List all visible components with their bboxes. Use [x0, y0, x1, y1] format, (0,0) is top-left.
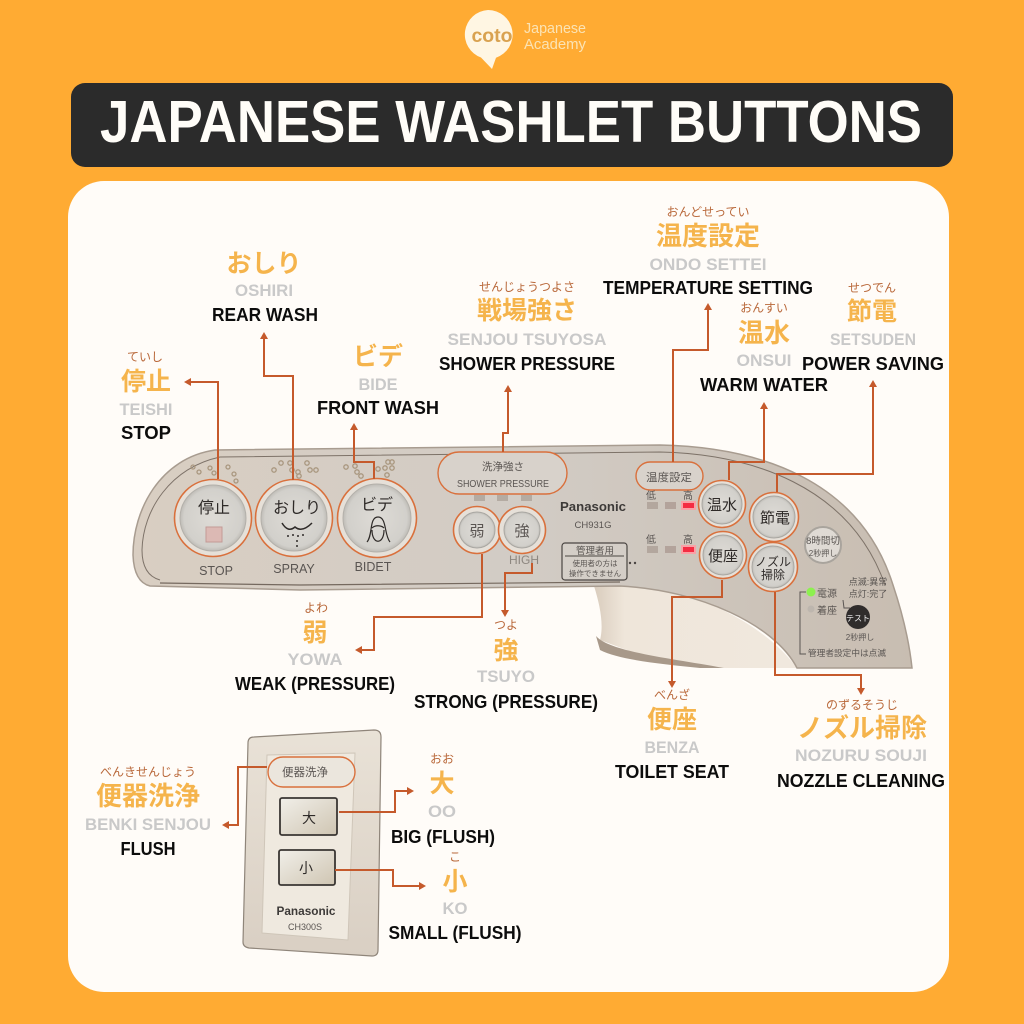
label: big flush: OO — [428, 802, 456, 821]
button: bidet: ビデ — [361, 495, 393, 514]
button: spray — [255, 479, 333, 576]
label: temperature setting: ONDO SETTEI — [650, 255, 766, 274]
label: toilet seat: 便座 — [647, 706, 697, 734]
arrow: temperature setting — [673, 303, 712, 462]
label: nozzle cleaning: のずるそうじ — [826, 698, 898, 712]
toilet seat body behind control panel — [594, 586, 797, 668]
label: shower pressure: せんじょうつよさ — [479, 280, 575, 294]
label: shower pressure: SHOWER PRESSURE — [439, 354, 615, 374]
temperature indicators: water: 高 — [683, 489, 693, 502]
button: weak: 弱 — [469, 523, 485, 540]
label: temperature setting: 温度設定 — [656, 221, 760, 251]
temperature indicators: seat: 低 — [646, 534, 656, 546]
status lights and test button: 点滅:異常 — [849, 576, 887, 587]
panel: white card — [68, 181, 949, 992]
label: nozzle cleaning: ノズル掃除 — [797, 713, 927, 743]
label: toilet seat: TOILET SEAT — [615, 762, 729, 782]
temperature indicators: water: 低 — [646, 490, 656, 502]
arrow: small flush — [335, 870, 426, 890]
arrow: nozzle cleaning — [775, 592, 865, 695]
button: bidet — [337, 478, 417, 574]
brand: Panasonic CH300S: Panasonic — [276, 906, 336, 918]
label: toilet seat — [615, 687, 729, 782]
brand: Panasonic CH931G: CH931G — [575, 520, 611, 531]
button: 8 hour off: 2秒押し — [809, 548, 837, 558]
label: stop: TEISHI — [120, 400, 172, 419]
label: rear wash: OSHIRI — [235, 281, 293, 300]
label pill: temperature setting: 温度設定 — [646, 471, 692, 484]
label: front wash — [317, 342, 439, 418]
label: flush — [85, 765, 211, 859]
pressure indicator lights — [474, 495, 532, 501]
admin notice box — [562, 543, 636, 580]
label: rear wash: REAR WASH — [212, 305, 318, 325]
braille dots — [191, 460, 394, 483]
arrow: weak — [355, 554, 482, 654]
button: weak — [453, 506, 501, 554]
label: big flush: おお — [430, 752, 454, 766]
label: warm water: WARM WATER — [700, 375, 828, 395]
arrow: big flush — [339, 787, 414, 812]
arrow: strong — [501, 563, 532, 617]
button: toilet seat: 便座 — [708, 548, 738, 565]
label: power saving: SETSUDEN — [830, 330, 916, 349]
button: big flush: 大 — [302, 810, 316, 826]
button: stop: 停止 — [198, 499, 230, 517]
button: strong: 強 — [514, 523, 530, 540]
label: power saving — [802, 281, 944, 374]
label: rear wash — [212, 250, 318, 325]
label pill: flush — [268, 757, 355, 787]
label: flush: BENKI SENJOU — [85, 815, 211, 834]
temperature indicators: seat — [646, 533, 695, 553]
label: weak: YOWA — [288, 650, 342, 669]
label pill: shower pressure — [438, 452, 567, 494]
label: front wash: ビデ — [353, 342, 403, 371]
arrow: power saving — [777, 380, 877, 492]
label: strong: つよ — [494, 618, 518, 632]
label: shower pressure — [439, 280, 615, 374]
label: flush: FLUSH — [120, 839, 176, 859]
label: nozzle cleaning — [777, 698, 945, 791]
button: bidet: BIDET — [355, 560, 392, 574]
temperature indicators: seat: 高 — [683, 533, 693, 546]
label: toilet seat: べんざ — [654, 687, 690, 702]
label: small flush: KO — [442, 899, 468, 918]
button: nozzle cleaning: ノズル — [755, 554, 791, 569]
arrow: shower pressure — [503, 385, 512, 452]
button: big flush — [280, 798, 337, 835]
arrow: warm water — [729, 402, 768, 480]
label: shower pressure: SENJOU TSUYOSA — [448, 330, 606, 349]
button: spray: おしり — [273, 499, 321, 517]
label: weak: よわ — [304, 601, 328, 615]
button: stop: STOP — [199, 564, 233, 578]
label: weak — [235, 601, 395, 694]
button: nozzle cleaning — [748, 542, 798, 592]
label: big flush — [391, 752, 495, 847]
logo: Japanese — [524, 20, 586, 37]
label: power saving: せつでん — [848, 281, 896, 295]
label: warm water: おんすい — [740, 301, 788, 315]
button: small flush — [279, 850, 335, 885]
label: stop — [120, 350, 172, 443]
label: flush: 便器洗浄 — [96, 781, 200, 811]
status lights and test button — [800, 576, 887, 658]
status lights and test button: テスト — [846, 614, 870, 623]
label pill: shower pressure: 洗浄強さ — [482, 460, 524, 473]
status lights and test button: 管理者設定中は点滅 — [808, 648, 886, 658]
arrow: stop — [184, 378, 218, 479]
panel: washlet control panel — [133, 445, 912, 668]
arrow: rear wash — [260, 332, 293, 480]
label: stop: 停止 — [121, 368, 171, 396]
button: warm water: 温水 — [707, 497, 737, 514]
label pill: flush: 便器洗浄 — [282, 765, 328, 779]
label: power saving: POWER SAVING — [802, 354, 944, 374]
button: toilet seat — [699, 531, 747, 579]
brand: Panasonic CH931G: Panasonic — [560, 499, 626, 514]
arrow: front wash — [350, 423, 374, 479]
label: small flush: 小 — [442, 868, 468, 896]
button: small flush: 小 — [299, 860, 313, 876]
brand: Panasonic CH300S — [276, 906, 336, 932]
arrow: flush — [222, 767, 267, 829]
label: power saving: 節電 — [847, 298, 897, 326]
label: warm water: 温水 — [738, 318, 790, 348]
button: spray: SPRAY — [273, 562, 315, 576]
label: strong: 強 — [493, 637, 519, 665]
button: stop — [174, 479, 252, 578]
label: temperature setting — [603, 205, 813, 298]
label: big flush: BIG (FLUSH) — [391, 827, 495, 847]
brand: Panasonic CH300S: CH300S — [288, 922, 322, 932]
label: strong — [414, 618, 598, 712]
logo: coto — [472, 26, 512, 47]
label: big flush: 大 — [429, 770, 455, 798]
label: small flush — [388, 850, 522, 943]
button: warm water — [698, 480, 746, 528]
status lights and test button: 着座 — [817, 604, 837, 617]
label: nozzle cleaning: NOZZLE CLEANING — [777, 771, 945, 791]
label pill: shower pressure: SHOWER PRESSURE — [457, 478, 549, 490]
status lights and test button: 2秒押し — [846, 632, 874, 642]
label: strong: STRONG (PRESSURE) — [414, 692, 598, 712]
label: weak: WEAK (PRESSURE) — [235, 674, 395, 694]
label: stop: ていし — [127, 350, 163, 364]
label: strong: TSUYO — [477, 667, 535, 686]
label: flush: べんきせんじょう — [100, 765, 196, 779]
label pill: temperature setting — [636, 462, 703, 490]
label: front wash: FRONT WASH — [317, 398, 439, 418]
logo: Academy — [524, 36, 586, 53]
label: warm water: ONSUI — [736, 351, 792, 370]
label: toilet seat: BENZA — [644, 738, 700, 757]
button: 8 hour off — [805, 527, 841, 563]
high label: HIGH — [509, 553, 539, 567]
label: small flush: こ — [449, 850, 461, 864]
brand: Panasonic CH931G — [560, 499, 626, 531]
label: shower pressure: 戦場強さ — [477, 297, 577, 325]
button: strong — [498, 506, 546, 554]
admin notice box: 使用者の方は — [572, 558, 618, 568]
temperature indicators: water — [646, 489, 695, 509]
logo — [465, 10, 586, 69]
button: power saving: 節電 — [760, 510, 790, 527]
label: nozzle cleaning: NOZURU SOUJI — [795, 746, 927, 765]
status lights and test button: 点灯:完了 — [849, 589, 887, 599]
label: weak: 弱 — [302, 619, 328, 647]
panel: flush remote — [243, 730, 381, 956]
button: power saving — [749, 492, 799, 542]
button: nozzle cleaning: 掃除 — [761, 567, 785, 582]
label: stop: STOP — [121, 423, 171, 443]
arrow: toilet seat — [668, 580, 722, 688]
admin notice box: 管理者用 — [576, 545, 614, 557]
status lights and test button: 電源 — [817, 587, 837, 600]
label: small flush: SMALL (FLUSH) — [388, 923, 522, 943]
label: temperature setting: TEMPERATURE SETTING — [603, 278, 813, 298]
label: temperature setting: おんどせってい — [666, 205, 750, 219]
title banner: JAPANESE WASHLET BUTTONS — [100, 89, 922, 155]
label: front wash: BIDE — [358, 375, 398, 394]
label: rear wash: おしり — [226, 250, 302, 278]
admin notice box: 操作できません — [569, 568, 622, 578]
label: warm water — [700, 301, 828, 395]
button: 8 hour off: 8時間切 — [806, 536, 840, 547]
